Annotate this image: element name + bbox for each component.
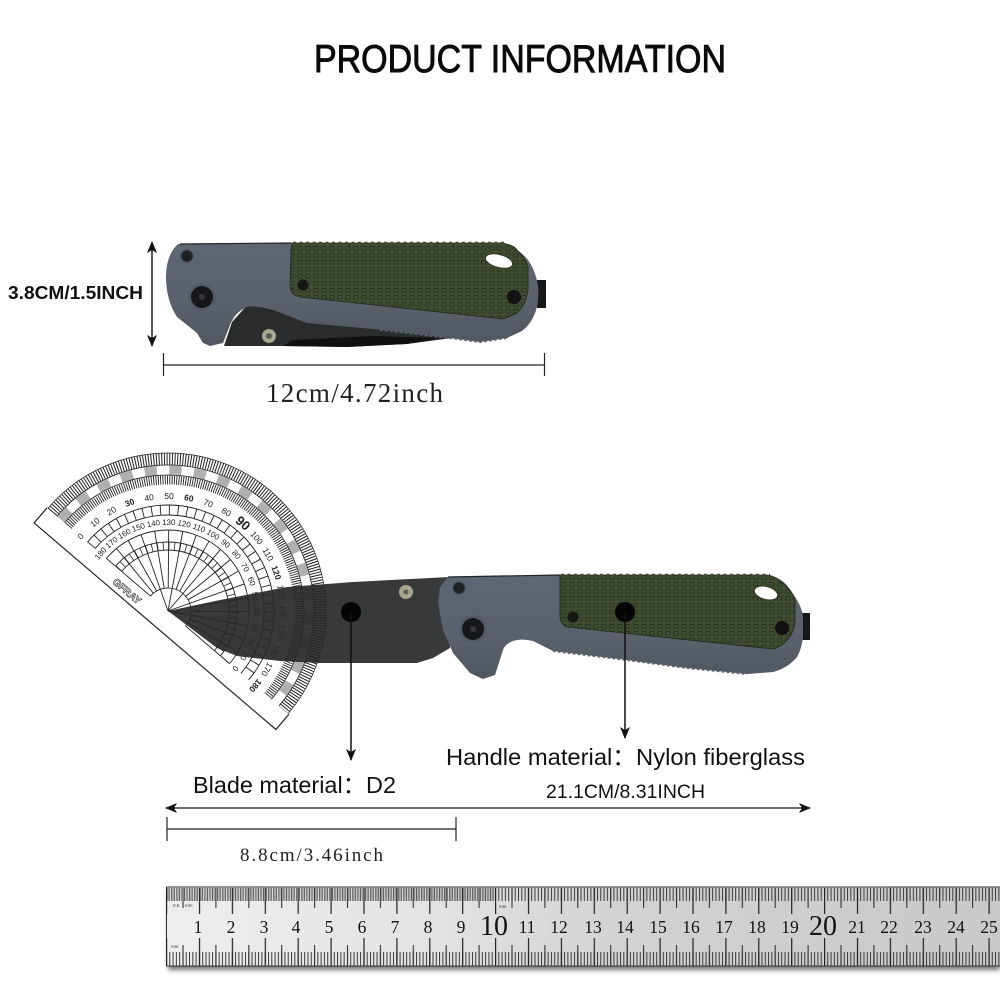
ruler numbers: 16 [682, 917, 700, 937]
ruler numbers: 24 [947, 917, 965, 937]
protractor outer degree labels: 160 [268, 643, 283, 660]
protractor outer degree labels [72, 440, 339, 695]
ruler numbers: 23 [914, 917, 932, 937]
ruler numbers: 22 [880, 917, 898, 937]
protractor outer degree labels: 20 [105, 504, 118, 518]
ruler unit labels: mm [185, 903, 193, 908]
arrow: handle pointer [624, 612, 626, 738]
protractor inner degree labels: 50 [250, 591, 261, 602]
protractor inner degree labels: 150 [131, 521, 147, 534]
text: blade material: Blade material：D2 [193, 772, 396, 798]
ruler numbers: 1 [194, 917, 202, 937]
callout: blade material [193, 602, 396, 798]
ruler numbers: 4 [292, 917, 301, 937]
protractor outer degree labels: 180 [247, 677, 264, 695]
icon: closed knife [166, 243, 546, 347]
protractor outer degree labels: 90 [233, 513, 253, 534]
icon: serrated top edge [561, 574, 770, 576]
protractor inner degree labels: 140 [146, 518, 161, 529]
ruler numbers: 11 [519, 917, 535, 937]
panel: open knife [168, 575, 810, 679]
arrow: blade length dimension line [167, 817, 456, 841]
panel: closed knife with dimensions [8, 242, 546, 408]
protractor outer degree labels: 100 [248, 529, 265, 547]
marker dot: handle [615, 602, 635, 622]
protractor outer degree labels: 40 [144, 492, 155, 503]
protractor outer degree labels: 70 [202, 497, 215, 510]
protractor outer degree labels: 50 [164, 491, 174, 501]
ruler numbers: 8 [424, 917, 433, 937]
ruler body [166, 887, 1000, 966]
protractor inner degree labels: 40 [252, 607, 261, 617]
ruler numbers: 17 [715, 917, 733, 937]
icon: spine edge [448, 575, 560, 577]
protractor spokes [106, 497, 282, 664]
protractor inner degree labels: 160 [116, 527, 133, 541]
ruler numbers: 18 [748, 917, 766, 937]
protractor scale rings [48, 388, 391, 714]
protractor outer degree labels: 110 [260, 546, 276, 563]
ruler numbers: 20 [809, 911, 837, 942]
protractor inner degree labels: 0 [230, 664, 240, 674]
protractor inner degree labels: 170 [104, 535, 120, 550]
protractor inner degree labels: 180 [93, 545, 109, 562]
icon: handle screws [453, 582, 789, 643]
panel: protractor measuring blade angle [34, 387, 392, 729]
protractor outer degree labels: 170 [259, 661, 275, 678]
protractor outer degree labels: 150 [275, 624, 287, 640]
title: PRODUCT INFORMATION [314, 38, 726, 81]
arrow: blade pointer [350, 612, 352, 760]
protractor outer degree labels: 60 [183, 492, 195, 504]
ruler top tick marks [166, 888, 1000, 914]
ruler numbers: 13 [584, 917, 602, 937]
text: blade length: 8.8cm/3.46inch [240, 845, 384, 866]
ruler numbers: 19 [781, 917, 799, 937]
arrow: overall length [166, 807, 810, 809]
text: overall length: 21.1CM/8.31INCH [546, 782, 705, 803]
protractor body [34, 387, 392, 729]
icon: handle [438, 575, 803, 679]
icon: blade stud [399, 585, 413, 599]
protractor outer degree labels: 120 [269, 564, 284, 581]
protractor outer degree labels: 10 [88, 515, 102, 529]
ruler numbers: 3 [260, 917, 269, 937]
ruler numbers: 25 [980, 917, 998, 937]
ruler numbers: 5 [325, 917, 334, 937]
protractor outer degree labels: 30 [123, 496, 136, 509]
ruler shadow [168, 890, 1000, 970]
protractor straight edge [34, 508, 289, 729]
arrow: width dimension line [164, 353, 544, 376]
protractor inner degree labels: 10 [238, 650, 250, 663]
text: height label: 3.8CM/1.5INCH [8, 283, 143, 303]
text: width label: 12cm/4.72inch [266, 378, 444, 408]
ruler numbers [194, 911, 998, 942]
protractor outer degree labels: 140 [278, 605, 288, 619]
protractor inner degree labels: 100 [205, 527, 221, 542]
arrow: height dimension [151, 242, 153, 346]
ruler numbers: 7 [391, 917, 400, 937]
protractor brand logo: GFRAY [110, 577, 143, 607]
ruler unit labels: mm [499, 904, 507, 909]
ruler bottom tick marks [166, 938, 1000, 966]
panel: steel ruler [166, 887, 1000, 970]
ruler numbers: 14 [616, 917, 634, 937]
protractor inner degree labels: 30 [250, 622, 260, 633]
icon: pocket clip [802, 613, 810, 640]
protractor inner degree labels: 80 [230, 548, 243, 561]
protractor outer degree labels: 130 [275, 584, 288, 600]
protractor inner degree labels [93, 480, 299, 676]
ruler numbers: 10 [480, 911, 508, 942]
icon: lanyard hole [753, 584, 779, 602]
ruler numbers: 15 [649, 917, 667, 937]
protractor outer degree labels: 80 [220, 505, 233, 519]
icon: blade [168, 577, 450, 663]
protractor outer degree labels: 0 [75, 531, 86, 541]
protractor inner degree labels: 70 [239, 561, 251, 574]
protractor inner degree labels: 20 [245, 636, 257, 648]
protractor inner degree labels: 120 [177, 518, 192, 530]
text: handle material: Handle material：Nylon fiberglass [446, 744, 805, 770]
ruler unit labels [171, 903, 507, 949]
icon: serrated bottom edge [553, 651, 747, 674]
ruler unit labels: 0.5 [173, 903, 180, 908]
ruler numbers: 21 [848, 917, 866, 937]
ruler numbers: 6 [358, 917, 367, 937]
ruler numbers: 2 [227, 917, 235, 937]
marker dot: blade [341, 602, 361, 622]
ruler unit labels: mm [171, 944, 179, 949]
protractor inner degree labels: 60 [246, 576, 257, 588]
protractor inner degree labels: 110 [191, 522, 207, 535]
callout: handle material [446, 602, 805, 770]
ruler numbers: 9 [457, 917, 466, 937]
ruler numbers: 12 [550, 917, 568, 937]
icon: green grip scale [560, 575, 795, 649]
protractor inner degree labels: 90 [219, 537, 232, 550]
protractor inner degree labels: 130 [162, 518, 176, 527]
